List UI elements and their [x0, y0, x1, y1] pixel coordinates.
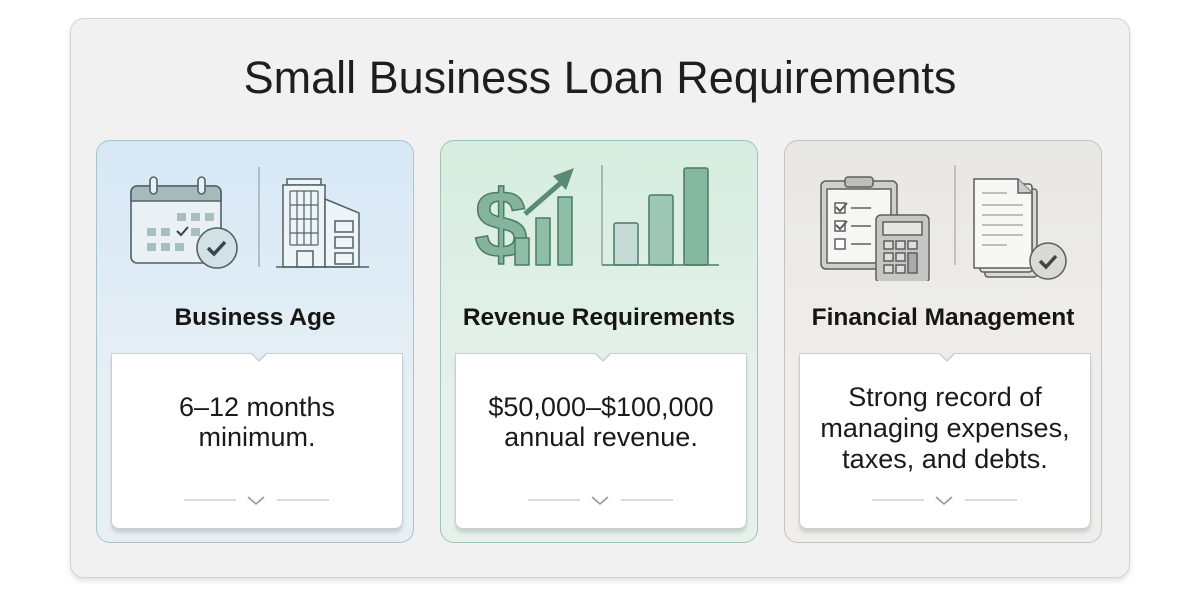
- text box: minimum.: [198, 422, 316, 452]
- text box: managing expenses,: [820, 413, 1070, 443]
- icon: calendar and building: [130, 167, 369, 269]
- text box: Strong record of: [848, 382, 1042, 412]
- heading: Revenue Requirements: [463, 304, 735, 331]
- panel: financial management: [784, 140, 1102, 543]
- text box: 6–12 months: [179, 392, 335, 422]
- text box: [799, 353, 1091, 529]
- text box: [455, 353, 747, 529]
- text box: annual revenue.: [504, 422, 698, 452]
- text box: $50,000–$100,000: [488, 392, 714, 422]
- text box: taxes, and debts.: [842, 444, 1048, 474]
- panel: business age: [96, 140, 414, 543]
- icon: dollar growth and bar chart: [474, 165, 719, 278]
- title: Small Business Loan Requirements: [244, 52, 956, 103]
- icon: clipboard, calculator and documents: [820, 165, 1067, 281]
- icon: dollar growth and bar chart: $: [474, 171, 528, 278]
- heading: Business Age: [174, 304, 336, 331]
- heading: Financial Management: [812, 304, 1074, 331]
- text box: [111, 353, 403, 529]
- panel: revenue requirements: [440, 140, 758, 543]
